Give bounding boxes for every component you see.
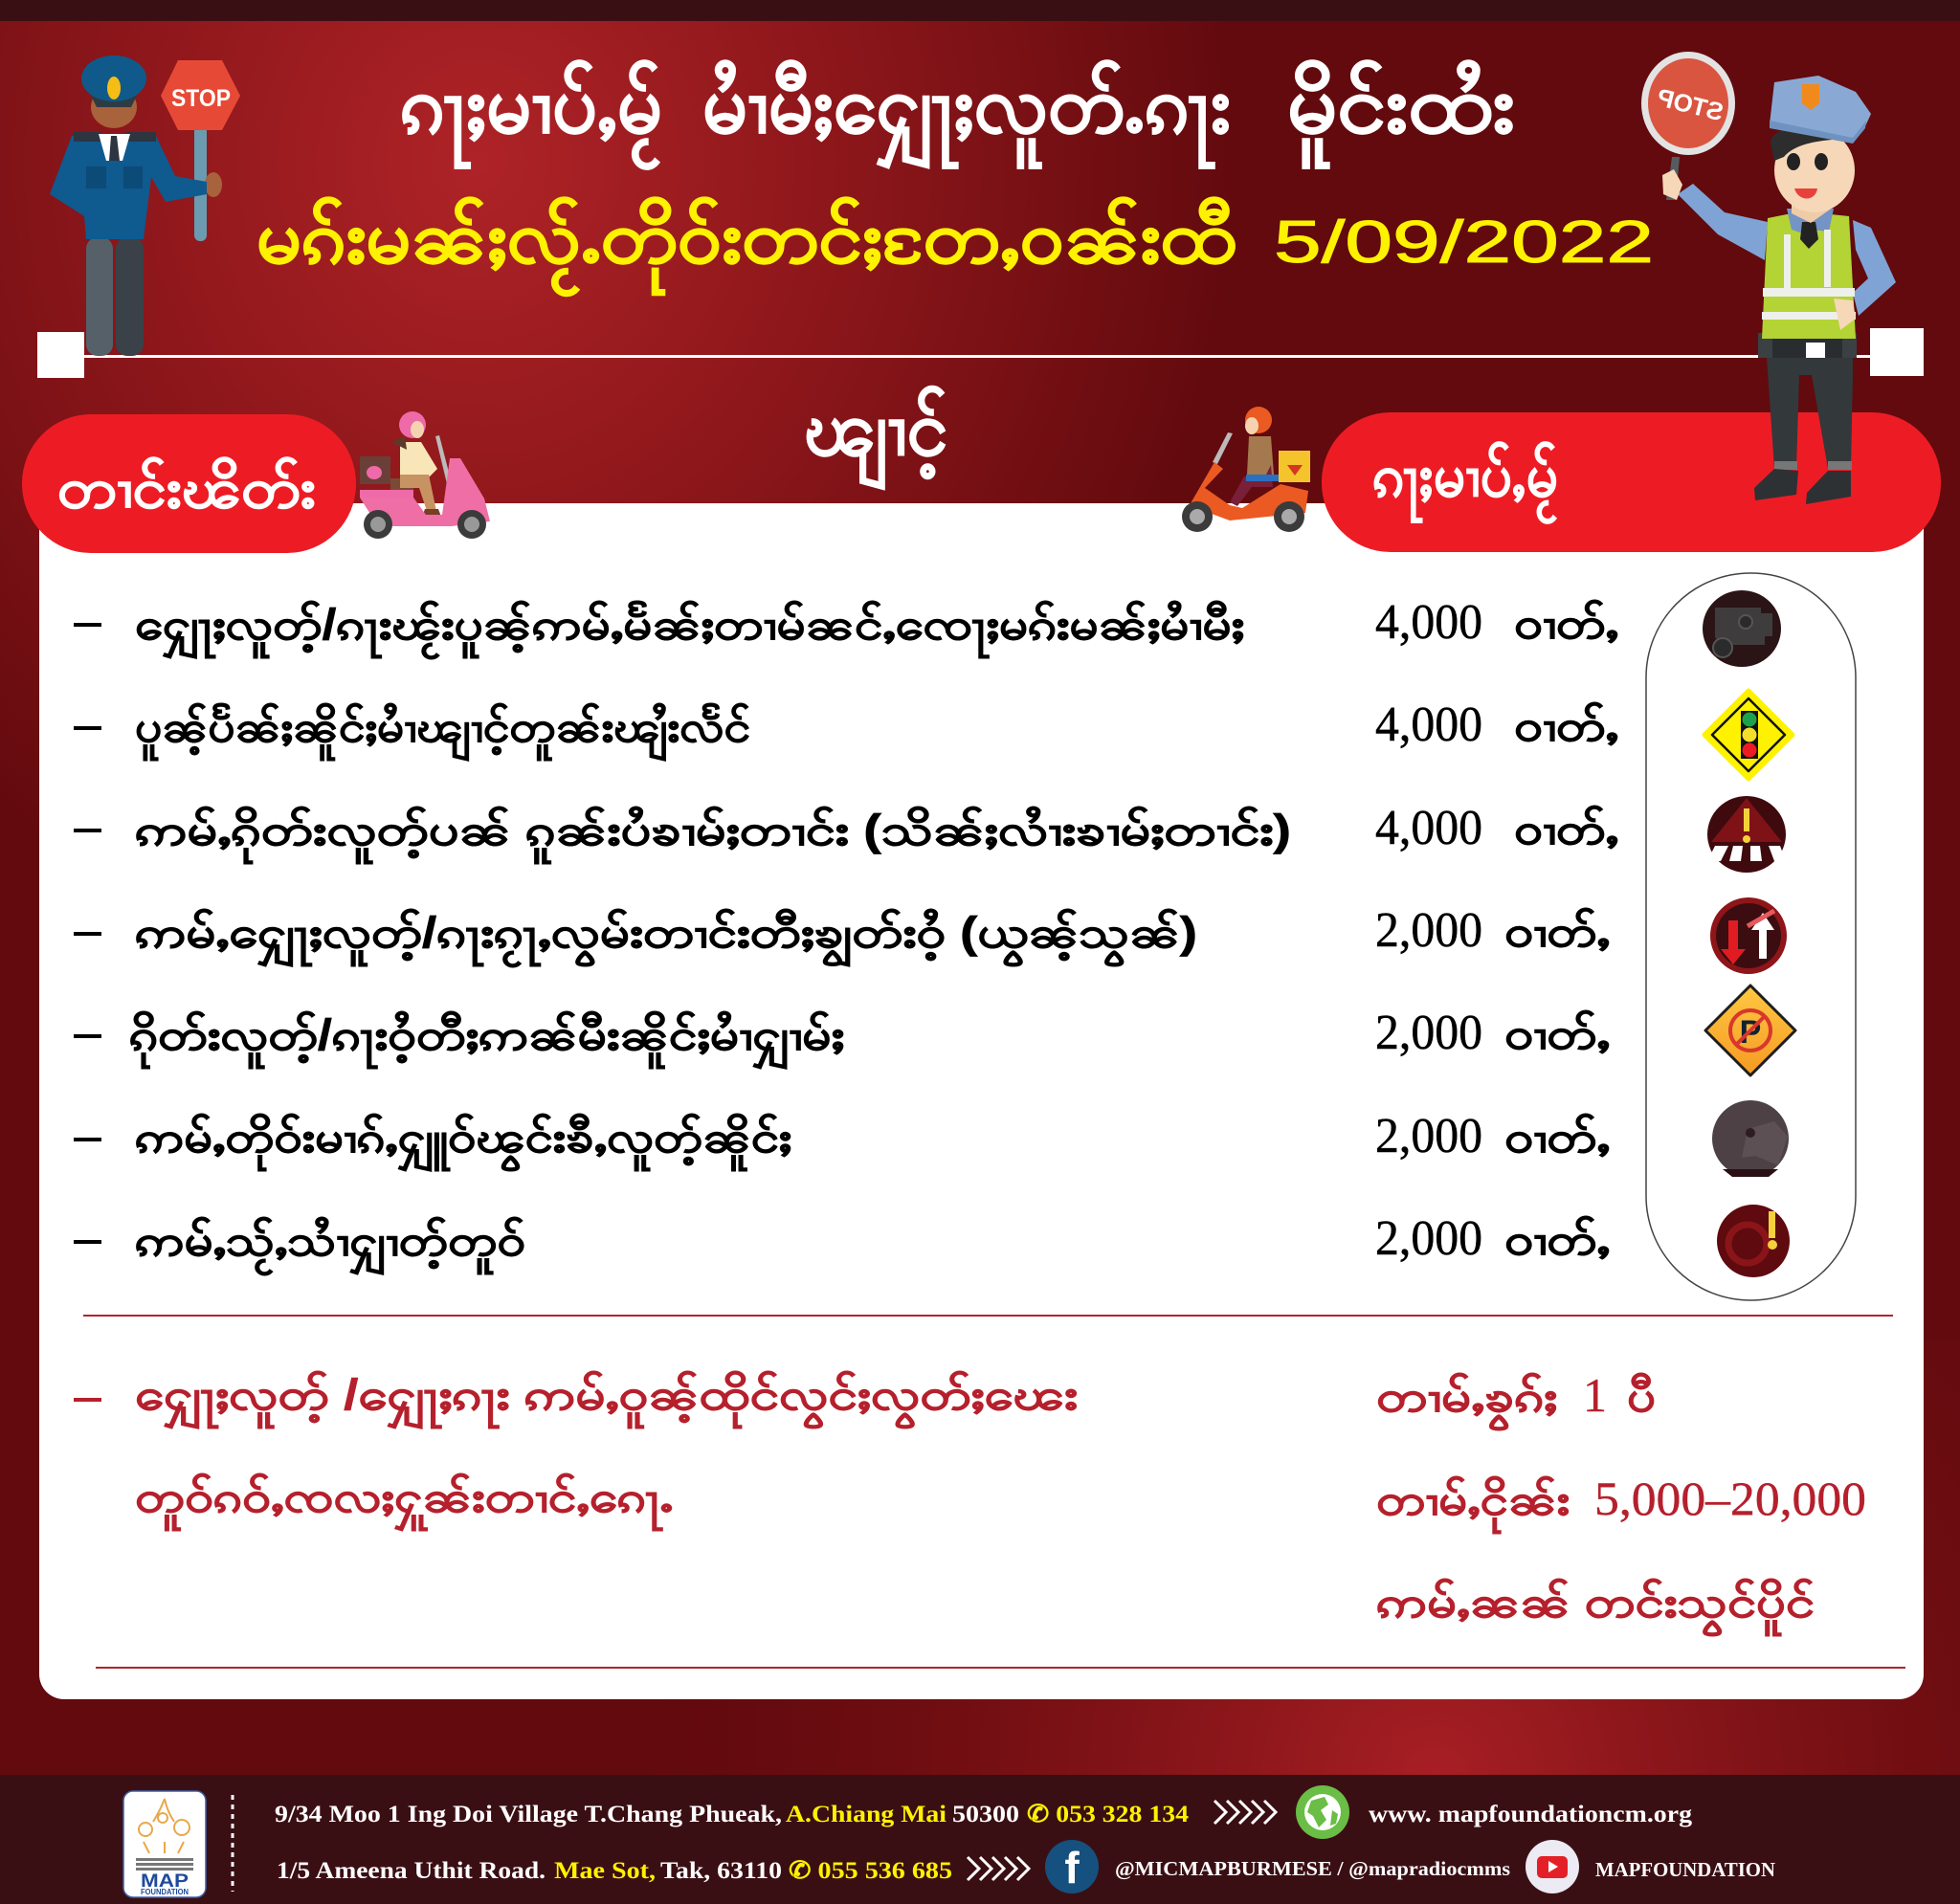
footer logo: FOUNDATION (141, 1888, 189, 1896)
penalty amounts (1376, 1368, 1866, 1637)
footer address line two: ✆ 055 536 685 (789, 1858, 952, 1884)
penalty amounts: တၢမ်ႇငိုၼ်း (1376, 1475, 1570, 1535)
penalty text (74, 1370, 1078, 1533)
footer address line one: ✆ 053 328 134 (1027, 1802, 1190, 1827)
fine amounts: 2,000 (1375, 903, 1482, 958)
footer address line one (275, 1802, 1190, 1827)
footer dotted divider (232, 1795, 234, 1892)
youtube channel: MAPFOUNDATION (1595, 1858, 1775, 1881)
fine amounts: 2,000 (1375, 1109, 1482, 1163)
icon: traffic officer with round stop paddle (1641, 52, 1896, 504)
icon: orange delivery scooter rider (1182, 407, 1310, 532)
title: ၵႃႈမၢပ်ႇမႂ် (400, 59, 662, 171)
fine amounts: ဝၢတ်ႇ (1514, 599, 1618, 648)
icon: headlight dark road (1712, 1100, 1789, 1177)
footer address line two: Mae Sot, (554, 1858, 656, 1884)
violation list: ဢမ်ႇၵိုတ်းလူတ့်ပၼ် ၵူၼ်းပႆၶၢမ်ႈတၢင်း (သိၼ်ႈလၢႆးၶၢမ်ႈတၢင်း) (135, 806, 1291, 865)
icon: no parking sign: P (1740, 1014, 1761, 1051)
icon: steering wheel warning (1717, 1205, 1790, 1277)
fine amounts: 4,000 (1375, 801, 1482, 855)
traffic icon capsule (1646, 573, 1856, 1300)
icon: youtube (1526, 1840, 1579, 1893)
footer logo (123, 1791, 206, 1897)
footer address line one: 50300 (952, 1802, 1019, 1827)
subtitle with date: 5/09/2022 (1274, 210, 1654, 276)
icon: facebook: f (1064, 1843, 1080, 1893)
footer address line two: 1/5 Ameena Uthit Road. (277, 1858, 546, 1884)
footer address line one: 9/34 Moo 1 Ing Doi Village T.Chang Phueak, (275, 1802, 782, 1827)
icon: pedestrian crossing warning (1707, 796, 1786, 873)
penalty amounts: 1 (1583, 1368, 1607, 1422)
title: မၢႆမီႈႁျေႃႈလူတ်ႉၵႃး (702, 58, 1231, 169)
icon: officer with stop sign (50, 55, 240, 356)
fine amounts: ဝၢတ်ႇ (1504, 907, 1610, 956)
icon: facebook (1045, 1840, 1099, 1893)
violation list: ဢမ်ႇႁျေႃႈလူတ့်/ၵႃးၵႂႃႇလွမ်းတၢင်းတီႈၶျွတ်းဝႆ့ (ယွၼ့်သွၼ်) (135, 908, 1197, 968)
icon: pink scooter rider (360, 411, 490, 539)
violation list: ပူၼ့်ပႅၼ်ႈၼိူင်ႈမၢႆၽျၢင့်တူၼ်းၽျႆးလႅင် (135, 702, 750, 763)
fine amounts: 4,000 (1375, 697, 1482, 752)
fine amounts: 4,000 (1375, 595, 1482, 650)
white panel (39, 503, 1924, 1699)
penalty amounts: ဢမ်ႇၼၼ် တင်းသွင်ပိူင် (1376, 1578, 1815, 1637)
footer address line two: Tak, 63110 (660, 1858, 782, 1884)
icon: no parking sign (1705, 985, 1795, 1075)
arrows: social (968, 1857, 1029, 1880)
penalty text: တူဝ်ၵဝ်ႇၸလႈႁူၼ်းတၢင်ႇၵေႃႉ (135, 1472, 673, 1533)
violation list: ဢမ်ႇတိုဝ်းမၢၵ်ႇႁျူဝ်ၽွင်းၶီႇလူတ့်ၼိူင်ႈ (135, 1113, 791, 1173)
violation list: ဢမ်ႇသႂ်ႇသၢႆႁျၢတ့်တူဝ် (135, 1216, 525, 1276)
icon: traffic officer with round stop paddle: STOP (1654, 82, 1726, 126)
website text: www. mapfoundationcm.org (1369, 1802, 1693, 1827)
divider: upper (83, 1315, 1893, 1317)
violation list: ႁျေႃႈလူတ့်/ၵႃးၽႂ်းပူၼ့်ဢမ်ႇမႅၼ်ႈတၢမ်ၼင်ႇၸေႃႈမၵ်းမၼ်ႈမၢႆမီႈ (135, 600, 1244, 660)
fine amounts: ဝၢတ်ႇ (1504, 1009, 1610, 1058)
title (400, 58, 1515, 171)
right heading pill (1322, 412, 1941, 552)
left heading pill: တၢင်းၽိတ်း (57, 457, 316, 520)
arrows: website (1214, 1801, 1276, 1824)
fine amounts: 2,000 (1375, 1006, 1482, 1060)
footer band (0, 1775, 1960, 1904)
subtitle with date: မၵ်းမၼ်ႈလႂ်ႉတိုဝ်းတင်ႈတႄႇဝၼ်းထီ (256, 196, 1236, 298)
footer address line two (277, 1858, 952, 1884)
icon: wrong way arrows (1710, 897, 1787, 974)
title: မိူင်းထႆး (1287, 58, 1515, 169)
penalty amounts: တၢမ်ႇၶွၵ်ႈ (1376, 1372, 1557, 1431)
fine amounts: ဝၢတ်ႇ (1504, 1215, 1610, 1264)
icon: speed camera (1703, 590, 1781, 667)
fine amounts: ဝၢတ်ႇ (1514, 805, 1618, 853)
divider: lower (96, 1667, 1905, 1669)
left heading pill (22, 414, 356, 553)
header rule with end squares (37, 328, 1924, 378)
violation list: ၵိုတ်းလူတ့်/ၵႃးဝႆ့တီႈဢၼ်မီးၼိူင်ႈမၢႆႁျၢမ်ႈ (129, 1010, 844, 1071)
violation list (74, 600, 1291, 1276)
penalty amounts: 5,000–20,000 (1594, 1472, 1866, 1525)
right heading pill: ၵႃႈမၢပ်ႇမႂ် (1372, 441, 1558, 523)
icon: globe (1296, 1785, 1349, 1839)
fine amounts (1375, 595, 1618, 1266)
footer logo: MAP (141, 1871, 189, 1892)
subtitle with date (256, 196, 1654, 298)
fine amounts: 2,000 (1375, 1211, 1482, 1266)
fine amounts: ဝၢတ်ႇ (1514, 701, 1618, 750)
social handles: @MICMAPBURMESE / @mapradiocmms (1115, 1857, 1510, 1880)
icon: officer with stop sign: STOP (171, 85, 231, 112)
panel heading: centre title: ၽျၢင့် (804, 385, 947, 490)
penalty text: ႁျေႃႈလူတ့် /ႁျေႃႈၵႃး ဢမ်ႇဝူၼ့်ထိုင်လွင်ႈလွတ်ႈၽေး (135, 1370, 1078, 1430)
icon: traffic light sign (1704, 691, 1793, 779)
penalty amounts: ပီ (1627, 1372, 1656, 1421)
footer address line one: A.Chiang Mai (786, 1802, 947, 1827)
fine amounts: ဝၢတ်ႇ (1504, 1113, 1610, 1162)
